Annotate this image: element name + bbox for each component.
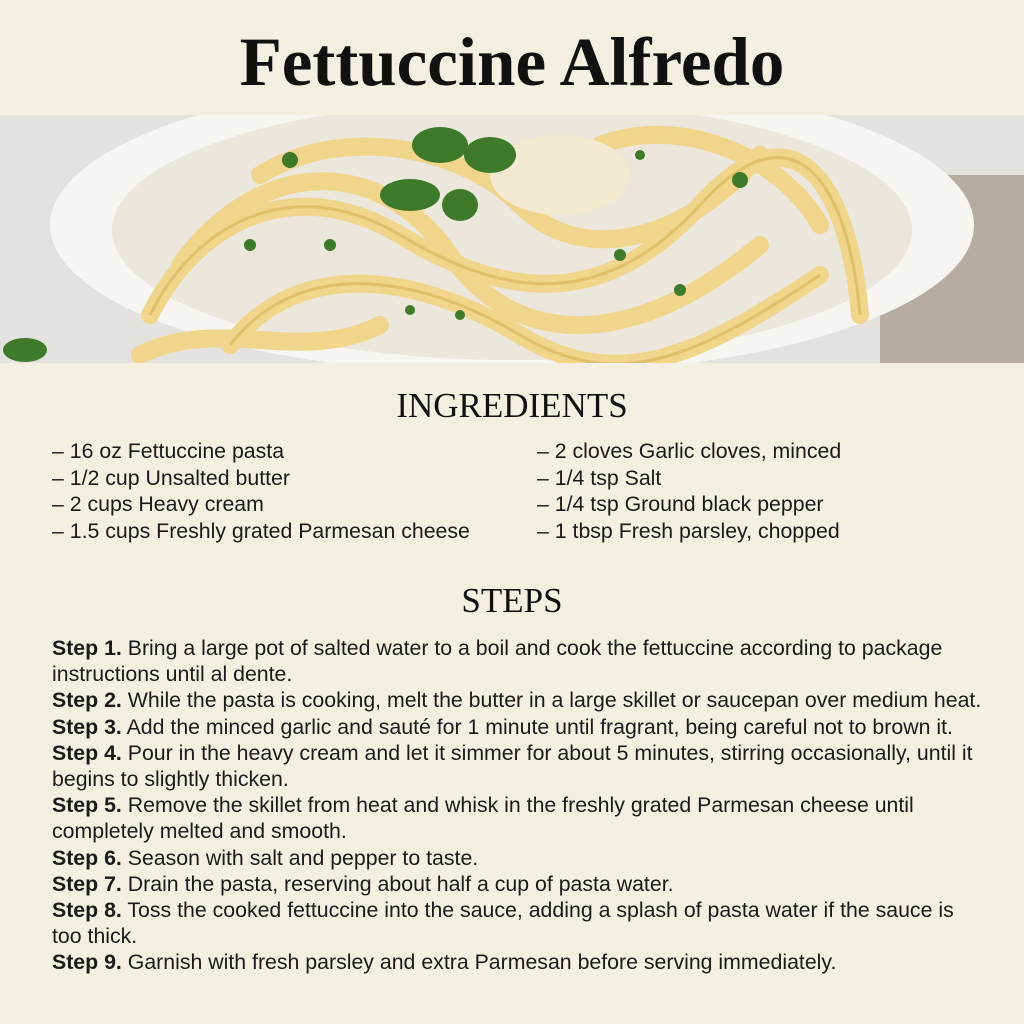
steps list: Step 6. Season with salt and pepper to taste. (52, 846, 478, 870)
steps list: Step 5. Remove the skillet from heat and whisk in the freshly grated Parmesan cheese until (52, 793, 914, 817)
heading: steps: STEPS (461, 581, 563, 620)
steps list: Step 4. Pour in the heavy cream and let it simmer for about 5 minutes, stirring occasionally, until it (52, 741, 973, 765)
steps list: Step 2. While the pasta is cooking, melt the butter in a large skillet or saucepan over medium heat. (52, 688, 981, 712)
steps list: Step 7. Drain the pasta, reserving about half a cup of pasta water. (52, 872, 674, 896)
steps list: begins to slightly thicken. (52, 767, 289, 791)
steps list: completely melted and smooth. (52, 819, 347, 843)
steps list: Step 3. Add the minced garlic and sauté for 1 minute until fragrant, being careful not to brown it. (52, 715, 953, 739)
ingredients left column: – 1/2 cup Unsalted butter (52, 466, 290, 490)
steps list (52, 636, 981, 974)
steps list: too thick. (52, 924, 137, 948)
steps list: Step 9. Garnish with fresh parsley and extra Parmesan before serving immediately. (52, 950, 836, 974)
ingredients right column: – 1/4 tsp Salt (537, 466, 661, 490)
photo: fettuccine bowl (0, 115, 1024, 363)
ingredients right column: – 1 tbsp Fresh parsley, chopped (537, 518, 840, 542)
ingredients left column: – 1.5 cups Freshly grated Parmesan cheese (52, 518, 470, 542)
steps list: Step 8. Toss the cooked fettuccine into the sauce, adding a splash of pasta water if the sauce is (52, 898, 954, 922)
title: Fettuccine Alfredo (240, 24, 784, 100)
steps list: instructions until al dente. (52, 662, 292, 686)
ingredients left column: – 16 oz Fettuccine pasta (52, 439, 284, 463)
steps list: Step 1. Bring a large pot of salted water to a boil and cook the fettuccine according to package (52, 636, 942, 660)
ingredients left column (52, 439, 470, 542)
ingredients right column: – 1/4 tsp Ground black pepper (537, 492, 824, 516)
heading: ingredients: INGREDIENTS (396, 386, 628, 425)
ingredients right column: – 2 cloves Garlic cloves, minced (537, 439, 841, 463)
ingredients right column (537, 439, 841, 542)
ingredients left column: – 2 cups Heavy cream (52, 492, 264, 516)
